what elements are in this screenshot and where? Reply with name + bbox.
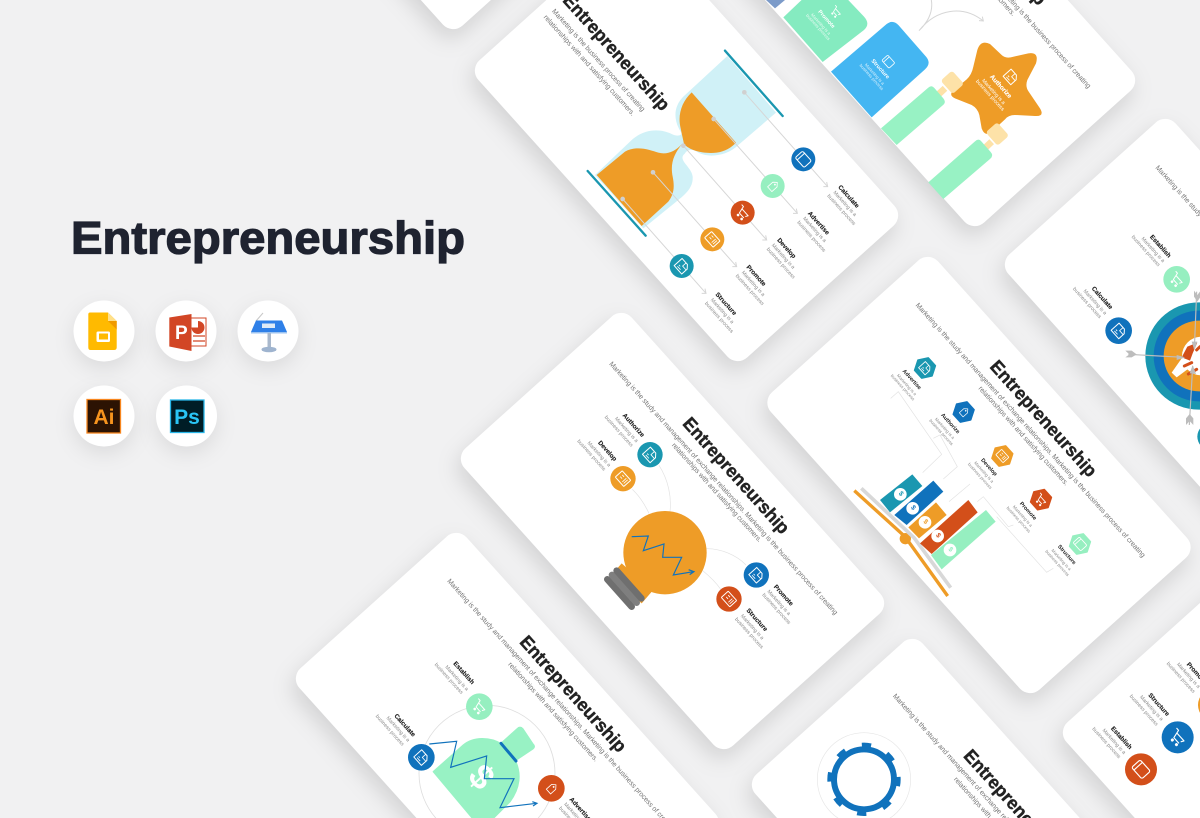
icon circle: Authorize bbox=[637, 442, 663, 467]
icon: Photoshop: Ps bbox=[174, 406, 200, 429]
icon circle: Calculate bbox=[791, 147, 815, 171]
label: Promote: Marketing is a bbox=[766, 589, 792, 617]
label: Calculate: business process bbox=[1071, 286, 1103, 320]
label: Calculate bbox=[1071, 285, 1114, 320]
label: Calculate: business process bbox=[374, 714, 405, 748]
label: Develop: Develop bbox=[596, 440, 618, 463]
icon circle: Structure bbox=[716, 586, 742, 612]
label: Structure bbox=[703, 291, 738, 335]
target slide content bbox=[1071, 164, 1200, 450]
hex icon: Authorize bbox=[950, 398, 978, 426]
panel: bar chart slide bbox=[762, 251, 1196, 699]
icon: PowerPoint: P bbox=[175, 323, 188, 344]
card surface bbox=[999, 113, 1200, 561]
label: Promote: Marketing is a bbox=[1012, 504, 1034, 528]
label: Authorize: Authorize bbox=[939, 412, 961, 435]
panel: target slide bbox=[999, 113, 1200, 561]
gear slide content bbox=[817, 692, 1123, 818]
card surface bbox=[1057, 581, 1200, 818]
slide description: Marketing is the study and management of exchange relationships. Marketing is the business process of creating bbox=[607, 360, 839, 616]
label: Advertise: business process bbox=[796, 220, 827, 254]
label: Develop: Develop bbox=[979, 458, 998, 478]
slide title: Entrepreneurship bbox=[516, 631, 631, 756]
bottom-right slide content bbox=[1091, 661, 1200, 785]
card surface bbox=[706, 0, 1141, 232]
label: Advertise: Marketing is a bbox=[896, 373, 918, 397]
icon circle: Structure bbox=[670, 254, 694, 278]
icon circle: Structure bbox=[1162, 721, 1194, 753]
orbit ring bbox=[419, 705, 555, 818]
label: Structure: Structure bbox=[714, 291, 738, 317]
label: Advertise: Marketing is a bbox=[801, 216, 827, 244]
panel: hourglass slide bbox=[469, 0, 904, 367]
icon circle: Establish bbox=[1163, 266, 1190, 293]
label: Advertise: Advertise bbox=[806, 210, 831, 237]
label: Authorize bbox=[603, 412, 646, 449]
label: Calculate: Marketing is a bbox=[1082, 288, 1108, 316]
bar chart: $ bbox=[909, 504, 917, 512]
label: Calculate: Calculate bbox=[393, 713, 417, 739]
slide description bbox=[922, 0, 1092, 90]
connector lines bbox=[891, 392, 1053, 572]
panel: partial top-left slide bbox=[185, 0, 619, 35]
block: Structure bbox=[831, 22, 929, 117]
label: Promote: business process bbox=[734, 273, 765, 307]
label: Establish: business process bbox=[433, 662, 464, 696]
block: Promote: Marketing is a bbox=[810, 12, 832, 36]
label: Authorize: Marketing is a bbox=[613, 416, 639, 444]
label: Develop: Marketing is a bbox=[586, 440, 612, 468]
hourglass bbox=[588, 51, 783, 236]
curved arrows bbox=[919, 0, 983, 31]
curved connectors bbox=[632, 465, 746, 589]
slide description: Marketing is the study and management of exchange relationships. Marketing is the business process of creating bbox=[914, 301, 1147, 559]
heading: Entrepreneurship: Entrepreneurship bbox=[71, 212, 465, 264]
slide description: relationships with and satisfying customers. bbox=[977, 385, 1070, 487]
label: Establish: business process bbox=[1091, 726, 1122, 760]
label: Calculate bbox=[826, 184, 861, 227]
star label: Authorize bbox=[974, 69, 1019, 113]
label: Develop: Marketing is a bbox=[770, 243, 796, 271]
label: Structure: Marketing is a bbox=[1138, 694, 1164, 722]
money bag: $ bbox=[460, 757, 502, 797]
icon circle: Advertise bbox=[538, 775, 565, 802]
label: Calculate: Calculate bbox=[836, 184, 861, 210]
icon: PowerPoint bbox=[156, 300, 216, 362]
card surface bbox=[469, 0, 904, 367]
panel: bottom-right slide bbox=[1057, 581, 1200, 818]
label: Advertise: Advertise bbox=[901, 369, 922, 391]
star bbox=[951, 43, 1042, 134]
arrows into target bbox=[1125, 291, 1200, 425]
label: Structure bbox=[1128, 692, 1171, 728]
label: Authorize: business process bbox=[928, 418, 954, 446]
label: Develop: Develop bbox=[775, 237, 797, 260]
label: Establish: Marketing is a bbox=[1101, 728, 1127, 756]
label: Structure: business process bbox=[733, 617, 765, 651]
hex icon: Develop bbox=[988, 442, 1016, 470]
label: Promote: Promote bbox=[745, 264, 767, 288]
panel: lightbulb slide bbox=[455, 307, 890, 755]
icon circle: Promote bbox=[700, 227, 724, 251]
hands bbox=[941, 71, 1009, 146]
book base bbox=[854, 488, 951, 596]
light bulb bbox=[607, 511, 707, 607]
connector lines with arrows bbox=[620, 90, 828, 293]
hex icon: Promote bbox=[1027, 485, 1055, 514]
label: Structure: Structure bbox=[745, 607, 769, 633]
label: Structure: business process bbox=[1128, 694, 1159, 728]
label: Calculate: Marketing is a bbox=[385, 715, 411, 743]
label: Advertise bbox=[557, 796, 592, 818]
label: Establish bbox=[433, 660, 476, 696]
label: Structure: Marketing is a bbox=[1050, 548, 1073, 572]
label: Promote: Marketing is a bbox=[740, 270, 766, 298]
panel: money bag slide bbox=[290, 527, 725, 818]
hex icon: Advertise bbox=[911, 354, 939, 382]
hourglass slide content bbox=[542, 0, 861, 335]
label: Promote: Promote bbox=[1018, 501, 1037, 522]
icon circle: Develop bbox=[731, 201, 755, 225]
bar chart slide content bbox=[854, 301, 1147, 596]
panel: star slide bbox=[706, 0, 1141, 232]
icon: Keynote bbox=[238, 300, 298, 362]
icon: Google Slides bbox=[74, 300, 134, 362]
label: Develop: business process bbox=[576, 439, 607, 473]
money bag slide content bbox=[374, 577, 677, 818]
slide description: relationships with and satisfying customers. bbox=[542, 14, 637, 117]
icon circle: Calculate bbox=[1105, 317, 1132, 344]
label: Calculate: Calculate bbox=[1090, 285, 1114, 311]
icon circle: Establish bbox=[466, 693, 493, 720]
arms holding star bbox=[881, 86, 992, 199]
star label: Authorize: Authorize bbox=[988, 73, 1013, 100]
icon: Illustrator: Ai bbox=[94, 406, 114, 429]
slide description: relationships with and satisfying customers. bbox=[506, 661, 600, 763]
gear bbox=[817, 733, 911, 818]
label: Authorize: Marketing is a bbox=[934, 417, 956, 440]
label: Structure: business process bbox=[1044, 549, 1070, 577]
label: Structure: Structure bbox=[1056, 544, 1077, 566]
block: Structure: Structure bbox=[870, 58, 890, 80]
label: Develop: business process bbox=[967, 462, 993, 490]
block: Promote bbox=[783, 0, 867, 62]
block: Structure: business process bbox=[859, 63, 885, 91]
card surface bbox=[746, 633, 1181, 818]
block: Structure: Marketing is a bbox=[864, 62, 886, 86]
label: Establish: Establish bbox=[1109, 725, 1133, 751]
money bag bbox=[429, 727, 537, 818]
label: Structure: Marketing is a bbox=[739, 613, 765, 641]
label: Establish: Establish bbox=[1148, 234, 1172, 259]
card surface bbox=[290, 527, 725, 818]
block: Promote: business process bbox=[805, 13, 831, 41]
icon: Photoshop bbox=[156, 386, 217, 446]
label: Establish: Marketing is a bbox=[1140, 236, 1166, 264]
icon circle: partial Promote bbox=[1198, 689, 1200, 721]
bar chart: $ bbox=[922, 518, 929, 526]
bar chart: $ bbox=[897, 490, 905, 498]
label: Promote: business process bbox=[1165, 661, 1196, 695]
card surface bbox=[455, 307, 890, 755]
star label: Authorize: Marketing is a bbox=[980, 78, 1006, 106]
label: Promote: business process bbox=[761, 592, 792, 626]
label: Structure bbox=[733, 607, 769, 651]
block: Promote: Promote bbox=[816, 9, 836, 30]
icon circle: Calculate bbox=[408, 744, 435, 771]
star slide content bbox=[766, 0, 1092, 199]
label: Advertise bbox=[890, 369, 922, 401]
label: Develop: business process bbox=[765, 247, 796, 281]
label: Calculate: business process bbox=[826, 193, 857, 227]
label: Calculate bbox=[374, 713, 417, 748]
bar chart: $ bbox=[934, 532, 942, 540]
icon: Illustrator bbox=[74, 386, 134, 446]
star label: Authorize: business process bbox=[974, 79, 1006, 113]
slide title: Entrepreneurship bbox=[679, 413, 794, 538]
label: Establish: business process bbox=[1130, 234, 1161, 268]
icon circle: partial teal bbox=[1197, 423, 1200, 450]
label: Promote: business process bbox=[1006, 505, 1032, 534]
label: Advertise: business process bbox=[890, 373, 916, 401]
label: Develop: Marketing is a bbox=[973, 460, 995, 484]
slide description: Marketing is the business process of creating bbox=[550, 7, 646, 113]
label: Authorize bbox=[928, 412, 961, 446]
icon circle: Advertise bbox=[761, 174, 785, 198]
label: Establish: Establish bbox=[452, 660, 476, 686]
slide description: relationships with and satisfying customers. bbox=[670, 441, 763, 544]
bar chart bbox=[880, 474, 996, 569]
icon circle: Promote bbox=[744, 562, 769, 588]
icon circle: Develop bbox=[610, 466, 636, 491]
label: Calculate: Marketing is a bbox=[832, 190, 858, 218]
card surface bbox=[762, 251, 1196, 699]
hex icon: Structure bbox=[1066, 530, 1094, 558]
label: Structure bbox=[1044, 544, 1077, 577]
icon circle: Establish bbox=[1125, 753, 1157, 785]
label: Structure: Structure bbox=[1147, 692, 1171, 718]
label: Establish: Marketing is a bbox=[443, 664, 469, 692]
label: Authorize: Authorize bbox=[621, 412, 646, 439]
panel: gear slide bbox=[746, 633, 1181, 818]
app icon row bbox=[74, 300, 298, 446]
label: Advertise bbox=[796, 210, 831, 254]
label: Promote: Promote bbox=[772, 584, 795, 608]
bar chart: $ bbox=[947, 546, 954, 554]
block: top slate bbox=[766, 0, 785, 8]
slide title: Entrepreneurship bbox=[986, 356, 1102, 481]
target rings bbox=[1145, 302, 1200, 410]
lightbulb slide content bbox=[576, 360, 839, 651]
label: Structure: business process bbox=[703, 301, 735, 335]
label: Structure: Marketing is a bbox=[709, 297, 735, 325]
label: Authorize: business process bbox=[603, 415, 634, 449]
